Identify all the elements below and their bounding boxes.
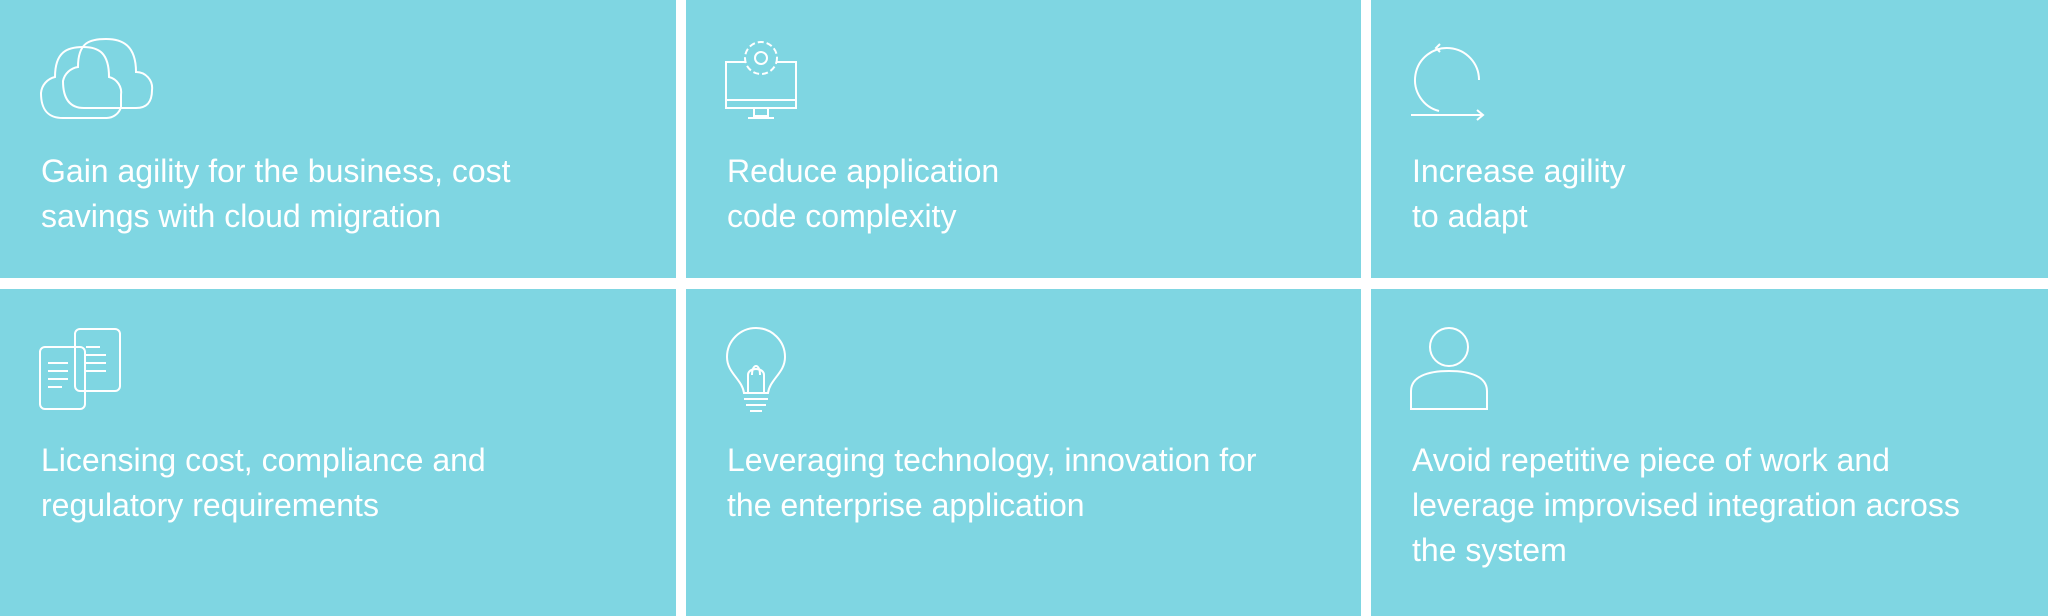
panel: cloud migration (0, 0, 676, 278)
text: Reduce application (727, 153, 999, 189)
icon: light bulb (726, 327, 786, 412)
text: Licensing cost, compliance and (41, 442, 486, 478)
text (1412, 442, 1960, 568)
icon: monitor gear (725, 41, 797, 119)
text: leverage improvised integration across (1412, 487, 1960, 523)
text (41, 153, 511, 234)
text: Increase agility (1412, 153, 1625, 189)
panel: licensing (0, 289, 676, 616)
icon: documents (39, 328, 121, 410)
text (41, 442, 486, 523)
text (1412, 153, 1626, 234)
panel: code complexity (686, 0, 1361, 278)
text: Leveraging technology, innovation for (727, 442, 1257, 478)
text: to adapt (1412, 198, 1528, 234)
icon: refresh cycle (1411, 43, 1484, 121)
text (727, 153, 999, 234)
icon: clouds (40, 38, 154, 119)
text: the enterprise application (727, 487, 1085, 523)
panel: agility (1371, 0, 2048, 278)
text: savings with cloud migration (41, 198, 441, 234)
text: regulatory requirements (41, 487, 379, 523)
icon: person (1410, 327, 1488, 410)
text: Avoid repetitive piece of work and (1412, 442, 1890, 478)
text: code complexity (727, 198, 956, 234)
panel: technology (686, 289, 1361, 616)
text: the system (1412, 532, 1567, 568)
panel: integration (1371, 289, 2048, 616)
text: Gain agility for the business, cost (41, 153, 511, 189)
text (727, 442, 1257, 523)
